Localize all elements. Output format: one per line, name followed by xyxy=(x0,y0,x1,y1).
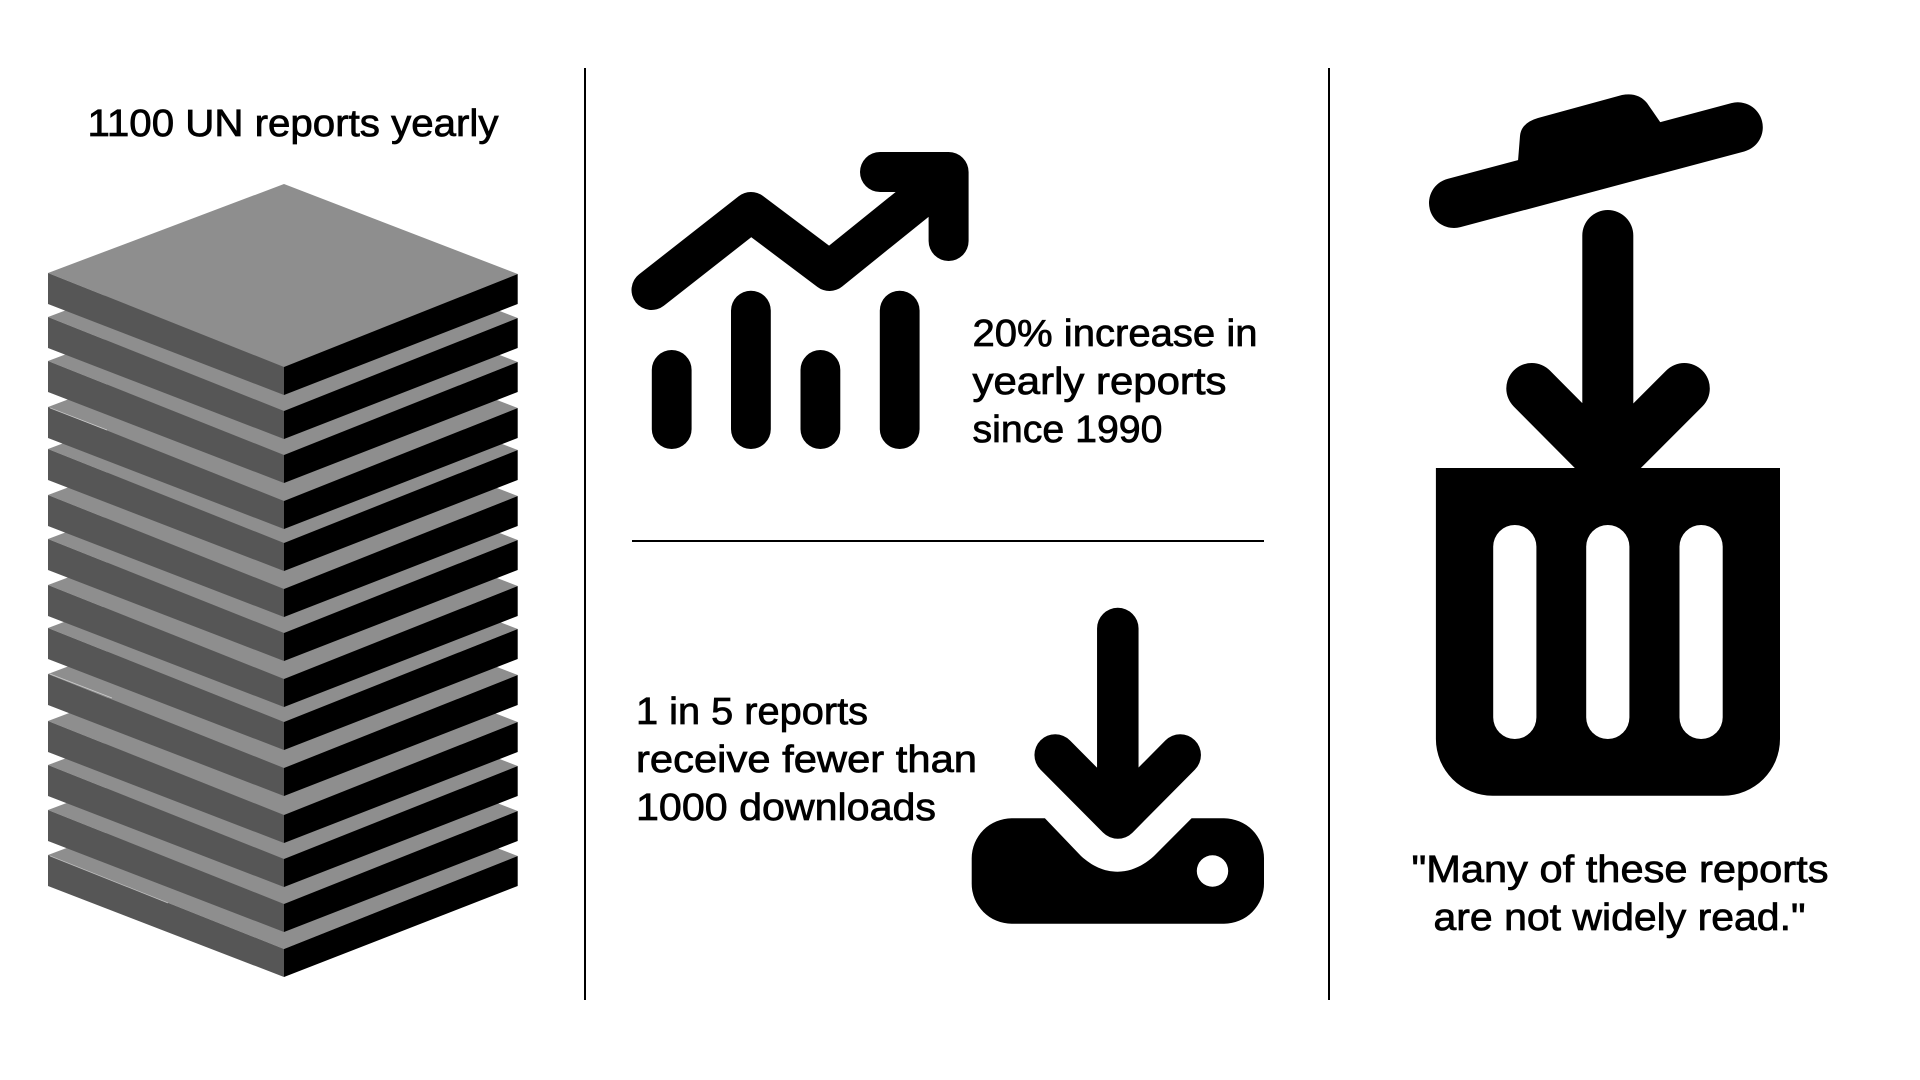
text: 1 in 5 reports receive fewer than 1000 downloads xyxy=(636,691,977,829)
text: quote: "Many of these reports xyxy=(1412,849,1828,891)
icon: report dropped into trash can xyxy=(1436,94,1780,796)
icon part: slots xyxy=(1493,525,1723,739)
text: 20% increase in yearly reports since 1990: 20% increase in xyxy=(972,313,1258,355)
text: quote: are not widely read." xyxy=(1434,897,1806,939)
panel: growth statistic xyxy=(652,172,1258,451)
text: quote xyxy=(1412,849,1828,939)
text: 1 in 5 reports receive fewer than 1000 downloads: 1000 downloads xyxy=(636,787,936,829)
icon part: can body xyxy=(1436,468,1780,796)
icon part: tray xyxy=(972,818,1264,924)
icon part: download arrow xyxy=(1055,628,1180,818)
icon part: trend line with arrow xyxy=(652,172,949,290)
icon part: arrow xyxy=(1532,236,1684,465)
chart: isometric stack of 14 report slabs xyxy=(48,184,518,977)
text: 20% increase in yearly reports since 1990: since 1990 xyxy=(972,409,1162,451)
panel: UN reports stack xyxy=(48,103,518,977)
icon part: bars xyxy=(652,291,920,449)
text: 20% increase in yearly reports since 1990: yearly reports xyxy=(972,361,1226,403)
panel: downloads statistic xyxy=(636,628,1264,924)
text: 1 in 5 reports receive fewer than 1000 downloads: receive fewer than xyxy=(636,739,977,781)
panel: trash quote xyxy=(1412,94,1828,939)
heading: 1100 UN reports yearly: 1100 UN reports yearly xyxy=(88,103,498,145)
icon: download into tray xyxy=(972,628,1264,924)
icon: rising trend chart xyxy=(652,172,949,449)
text: 20% increase in yearly reports since 1990 xyxy=(972,313,1258,451)
text: 1 in 5 reports receive fewer than 1000 downloads: 1 in 5 reports xyxy=(636,691,868,733)
icon part: lid xyxy=(1454,94,1738,203)
